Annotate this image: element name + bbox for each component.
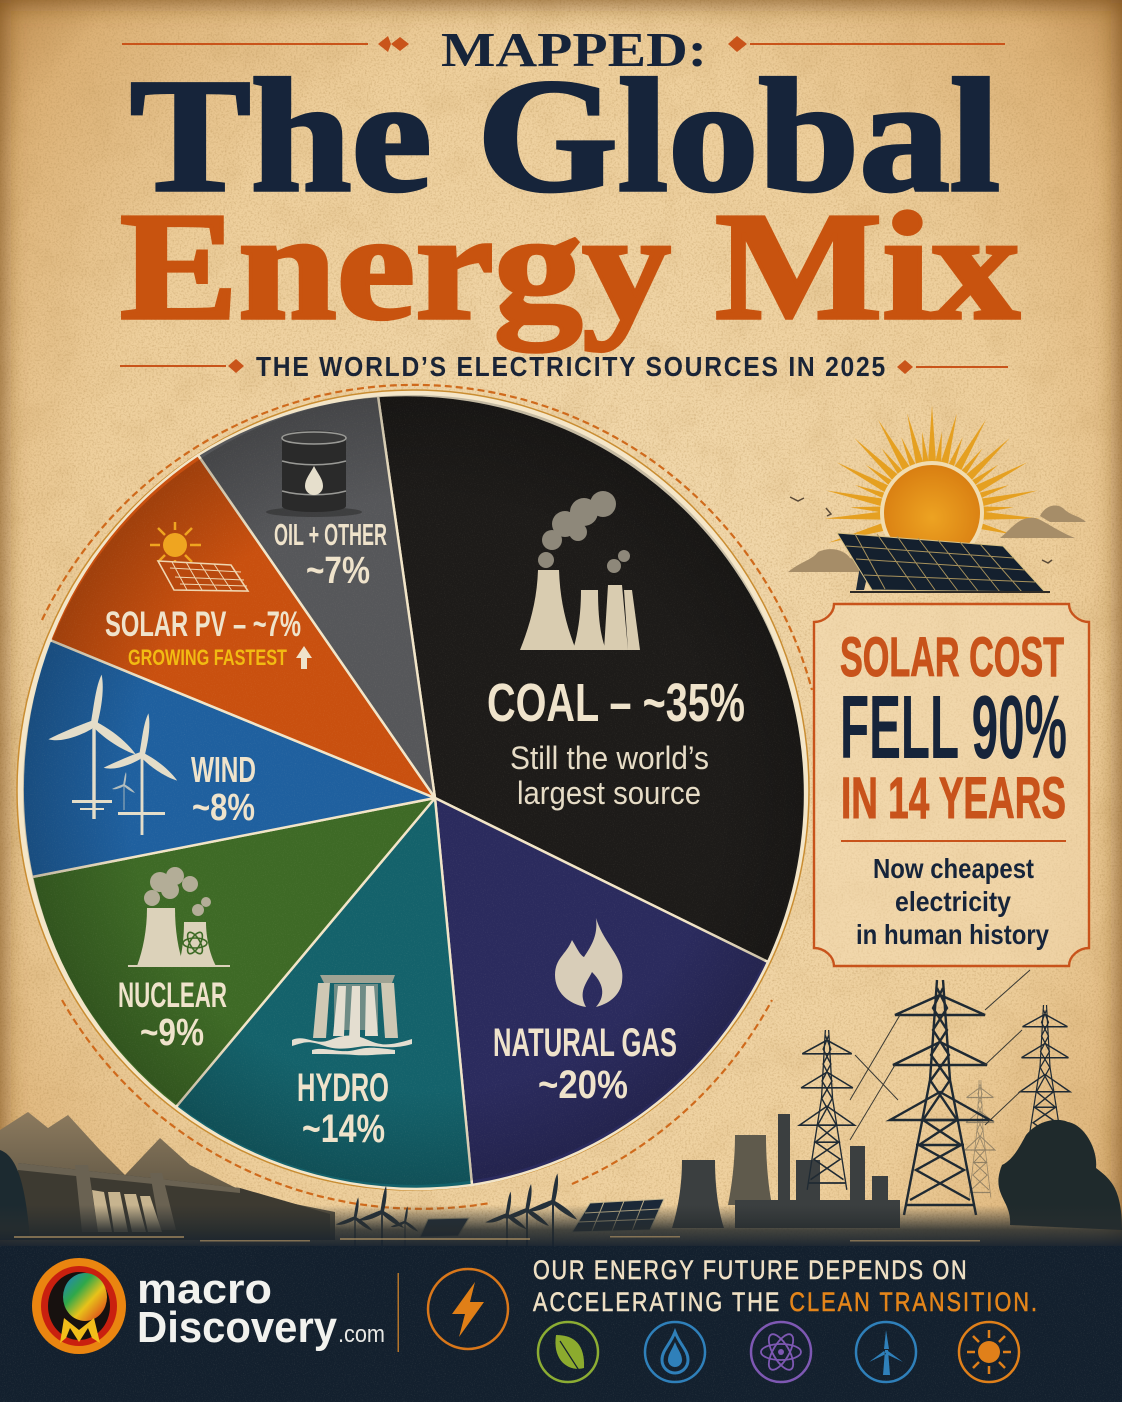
callout note: electricity: [895, 886, 1011, 917]
label: nuclear: NUCLEAR: [118, 976, 227, 1015]
callout frame: [814, 604, 1089, 966]
subtitle ornaments: [120, 359, 1008, 374]
slice: coal: [378, 395, 805, 962]
label: growing fastest: GROWING FASTEST: [128, 645, 287, 670]
title: Energy Mix: Energy Mix: [120, 182, 1020, 352]
callout note: in human history: [856, 919, 1049, 950]
icon: wind turbines: [48, 675, 177, 835]
label: wind: WIND: [191, 749, 256, 790]
label: oil + other: OIL + OTHER: [274, 517, 387, 552]
logo: macroDiscovery emblem: [32, 1258, 126, 1354]
logo wordmark: Discovery: Discovery: [137, 1303, 337, 1352]
icon: up arrow: [296, 646, 312, 669]
illustration: birds: [790, 497, 1052, 563]
label: oil + other: [274, 517, 387, 592]
label: nuclear: [118, 976, 227, 1054]
label: natural gas: NATURAL GAS: [493, 1021, 677, 1065]
footer divider: [398, 1273, 399, 1352]
label: coal: COAL – ~35%: [487, 673, 745, 733]
label: hydro: HYDRO: [297, 1066, 389, 1110]
slice: solar pv: [50, 455, 435, 798]
title: The Global: The Global: [130, 47, 1000, 226]
icon: water drop badge: [645, 1322, 705, 1382]
value: natural gas: ~20%: [538, 1063, 628, 1107]
logo wordmark: .com: .com: [338, 1321, 385, 1348]
illustration: solar panel: [837, 533, 1050, 593]
title: kicker: MAPPED:: [441, 22, 707, 77]
icon: sun badge: [959, 1322, 1019, 1382]
icon: wind turbine badge: [856, 1322, 916, 1382]
icon: flame: [555, 918, 622, 1007]
illustration: electricity pylons: [800, 980, 1070, 1215]
illustration: tree: [998, 1120, 1122, 1230]
illustration: small wind turbines: [336, 1173, 577, 1262]
slice: nuclear: [32, 798, 435, 1107]
icon: nuclear plant: [128, 867, 230, 967]
illustration: ground strip: [0, 1205, 1122, 1250]
label: coal note line 1: Still the world’s: [510, 740, 709, 776]
value: wind: ~8%: [192, 787, 255, 829]
icon: oil barrel: [266, 430, 362, 517]
slice: wind: [23, 640, 435, 877]
icon: lightning bolt badge: [428, 1269, 508, 1349]
label: wind: [191, 749, 256, 829]
illustration: clouds: [788, 505, 1086, 572]
logo wordmark: macro: macro: [137, 1265, 272, 1312]
illustration: brush streaks: [14, 1236, 980, 1242]
value: hydro: ~14%: [302, 1107, 385, 1151]
label: hydro: [297, 1066, 389, 1151]
label: coal note line 2: largest source: [517, 775, 701, 811]
slice: hydro: [176, 798, 472, 1189]
illustration: mountains: [0, 1112, 335, 1240]
pie rim: [17, 390, 809, 1190]
label: solar pv: [105, 605, 312, 670]
closing message line 1: OUR ENERGY FUTURE DEPENDS ON: [533, 1256, 967, 1286]
illustration: sun with rays: [824, 405, 1040, 565]
label: coal: [487, 673, 745, 811]
slice: natural gas: [435, 798, 768, 1185]
closing message line 2: ACCELERATING THE CLEAN TRANSITION.: [533, 1288, 1037, 1318]
pie outer dashed ring: [42, 385, 812, 1209]
callout divider: [841, 840, 1066, 842]
illustration: power plant: [672, 1114, 900, 1228]
callout: solar cost: [814, 604, 1089, 966]
value: oil + other: ~7%: [306, 550, 370, 592]
callout note: Now cheapest: [873, 853, 1034, 884]
illustration: dam: [0, 1150, 330, 1240]
value: nuclear: ~9%: [140, 1012, 204, 1054]
icon: coal plant: [520, 491, 640, 650]
icon: hydro dam: [292, 975, 412, 1055]
label: natural gas: [493, 1021, 677, 1107]
callout note: [856, 853, 1049, 950]
icon: atom badge: [751, 1322, 811, 1382]
illustration: power lines: [850, 970, 1030, 1140]
pie chart: [23, 395, 805, 1189]
label: solar pv: SOLAR PV – ~7%: [105, 605, 301, 644]
subtitle: THE WORLD’S ELECTRICITY SOURCES IN 2025: [256, 351, 885, 382]
top ornament: left rule and diamond: [122, 36, 409, 52]
slice: oil + other: [198, 396, 435, 798]
icon: solar sun and panel: [150, 522, 248, 591]
illustration: small solar panels: [420, 1199, 664, 1237]
icon: leaf badge: [538, 1322, 598, 1382]
top ornament: right rule and diamond: [728, 36, 1005, 52]
footer band: [0, 1246, 1122, 1402]
